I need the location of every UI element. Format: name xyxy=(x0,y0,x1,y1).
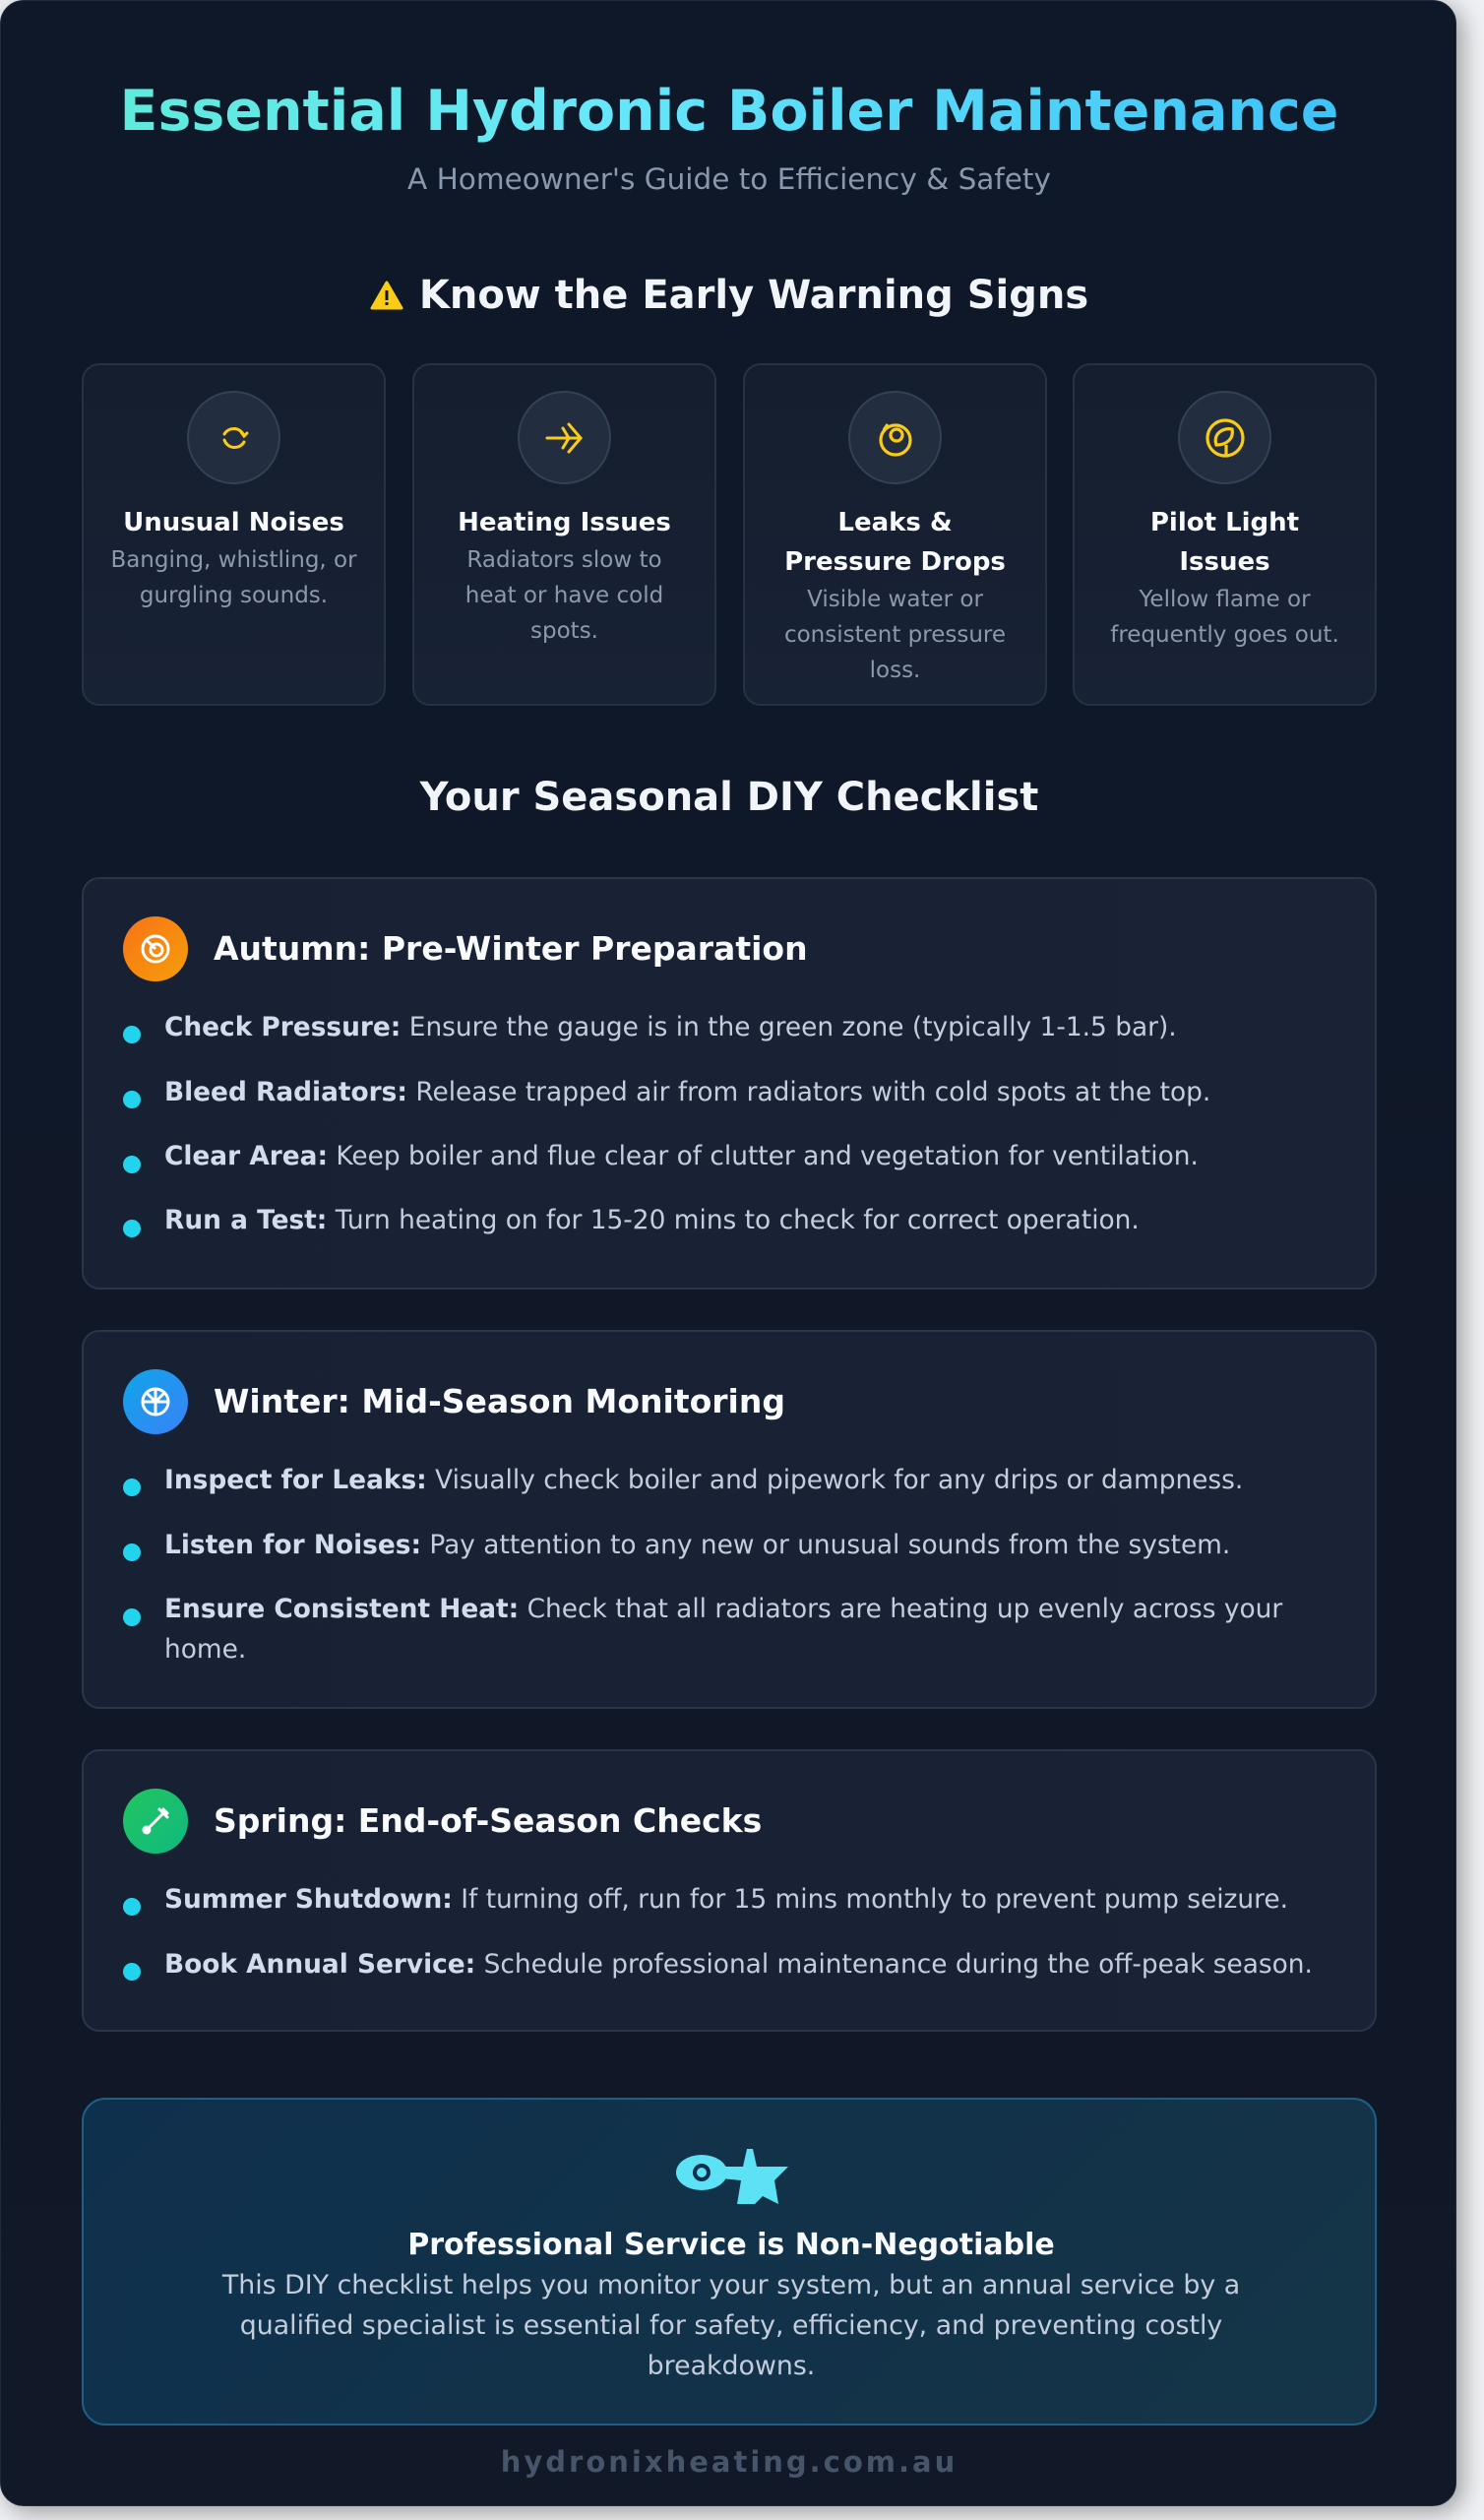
card: unusual noises xyxy=(82,363,386,706)
panel: winter: Listen for Noises: Pay attention to any new or unusual sounds from the system. xyxy=(164,1530,1230,1560)
panel: autumn: Run a Test: Turn heating on for 15-20 mins to check for correct operation. xyxy=(164,1205,1140,1235)
card: heating issues: Heating Issues xyxy=(458,508,671,537)
card: leaks: Pressure Drops xyxy=(784,547,1006,577)
callout title: Professional Service is Non-Negotiable xyxy=(407,2228,1055,2262)
icon: arrow xyxy=(518,391,611,484)
card: heating issues: Radiators slow to heat or have cold spots. xyxy=(465,547,663,644)
card: heating issues xyxy=(412,363,716,706)
card: leaks: Visible water or consistent pressure loss. xyxy=(784,587,1006,683)
card: pilot light: Yellow flame or frequently goes out. xyxy=(1110,587,1339,648)
panel: spring xyxy=(82,1749,1377,2032)
icon: spring xyxy=(123,1789,188,1854)
subtitle: A Homeowner's Guide to Efficiency & Safety xyxy=(407,162,1051,196)
card: unusual noises: Banging, whistling, or gurgling sounds. xyxy=(110,547,357,608)
panel: winter: Ensure Consistent Heat: Check that all radiators are heating up evenly across your home. xyxy=(164,1594,1282,1665)
panel: spring: Summer Shutdown: If turning off, run for 15 mins monthly to prevent pump seizure. xyxy=(164,1884,1288,1915)
footer: hydronixheating.com.au xyxy=(501,2445,958,2479)
card: pilot light: Pilot Light xyxy=(1150,508,1299,537)
heading: warning signs: Know the Early Warning Signs xyxy=(419,273,1088,318)
heading: winter: Winter: Mid-Season Monitoring xyxy=(214,1382,785,1420)
icon: autumn xyxy=(123,916,188,981)
panel: autumn: Clear Area: Keep boiler and flue clear of clutter and vegetation for ventilation. xyxy=(164,1141,1199,1171)
icon: wrench badge xyxy=(676,2149,788,2204)
panel: spring: Book Annual Service: Schedule professional maintenance during the off-peak season. xyxy=(164,1949,1313,1980)
callout: professional service xyxy=(82,2098,1377,2426)
card: pilot light xyxy=(1073,363,1377,706)
title: Essential Hydronic Boiler Maintenance xyxy=(120,79,1338,144)
card: unusual noises: Unusual Noises xyxy=(123,508,344,537)
panel: autumn: Check Pressure: Ensure the gauge is in the green zone (typically 1-1.5 bar). xyxy=(164,1012,1177,1042)
card: leaks: Leaks & xyxy=(837,508,953,537)
callout text: This DIY checklist helps you monitor your system, but an annual service by a qualified specialist is essential for safety, efficiency, and preventing costly breakdowns. xyxy=(222,2270,1240,2381)
heading: checklist: Your Seasonal DIY Checklist xyxy=(420,775,1038,820)
icon: winter xyxy=(123,1369,188,1434)
panel: autumn xyxy=(82,877,1377,1290)
heading: spring: Spring: End-of-Season Checks xyxy=(214,1801,762,1840)
panel: winter xyxy=(82,1330,1377,1709)
icon: noise xyxy=(187,391,280,484)
heading: autumn: Autumn: Pre-Winter Preparation xyxy=(214,929,808,968)
icon: leak xyxy=(848,391,942,484)
panel: autumn: Bleed Radiators: Release trapped air from radiators with cold spots at the top. xyxy=(164,1077,1210,1107)
panel: winter: Inspect for Leaks: Visually check boiler and pipework for any drips or dampness. xyxy=(164,1465,1243,1495)
icon: flame xyxy=(1178,391,1271,484)
card: pilot light: Issues xyxy=(1179,547,1270,577)
card: leaks xyxy=(743,363,1047,706)
